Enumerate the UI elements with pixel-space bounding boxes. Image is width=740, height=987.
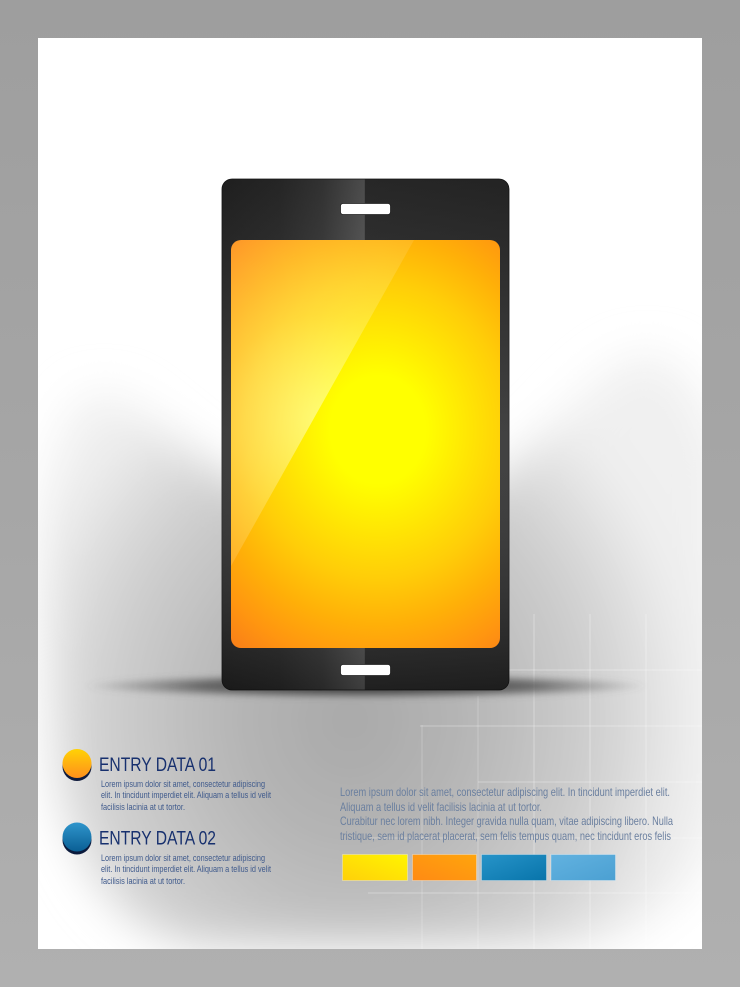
top speaker slot [340, 204, 390, 214]
icon: blue dot [62, 822, 92, 854]
grid of light lines [368, 614, 702, 949]
entry 02 description: Lorem ipsum dolor sit amet, consectetur adipiscing [101, 853, 265, 864]
entry 02 description [101, 853, 271, 887]
legend entry 02 [62, 822, 271, 887]
entry 02 description: elit. In tincidunt imperdiet elit. Aliquam a tellus id velit [101, 864, 271, 875]
entry 02 description: facilisis lacinia at ut tortor. [101, 876, 185, 887]
icon: orange dot [62, 749, 92, 781]
entry 01 heading: ENTRY DATA 01 [99, 755, 216, 776]
bottom home button [340, 664, 390, 676]
phone shadow [84, 673, 648, 699]
body paragraph: Aliquam a tellus id velit facilisis lacinia at ut tortor. [340, 800, 542, 814]
entry 01 description: facilisis lacinia at ut tortor. [101, 802, 185, 813]
phone body [222, 179, 509, 690]
swatch: dark blue [482, 854, 546, 880]
entry 01 description [101, 779, 271, 813]
body paragraph [340, 785, 673, 843]
legend entry 01 [62, 749, 271, 813]
screen gloss [231, 240, 414, 566]
entry 01 description: Lorem ipsum dolor sit amet, consectetur adipiscing [101, 779, 265, 790]
phone [222, 179, 509, 690]
swatch: yellow [342, 854, 408, 880]
screen [231, 240, 500, 648]
swatch: orange [412, 854, 476, 880]
entry 02 heading: ENTRY DATA 02 [99, 828, 216, 850]
swatch: light blue [551, 854, 616, 880]
color swatches [342, 854, 616, 880]
entry 01 description: elit. In tincidunt imperdiet elit. Aliquam a tellus id velit [101, 790, 271, 801]
